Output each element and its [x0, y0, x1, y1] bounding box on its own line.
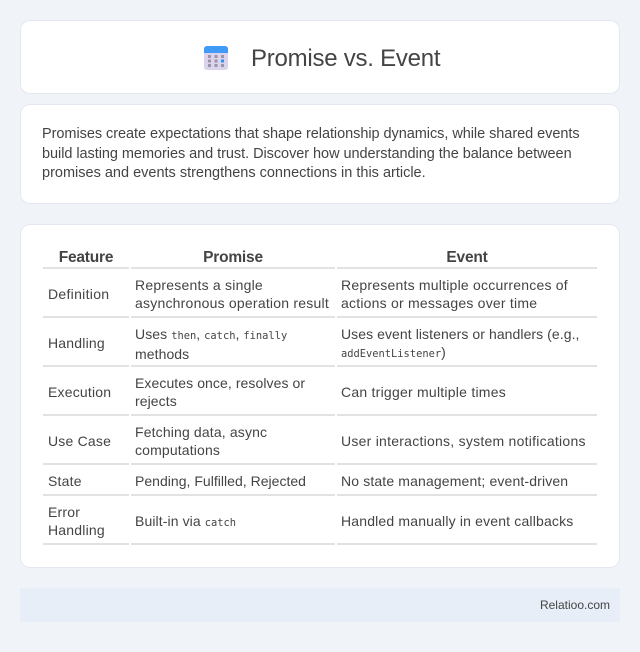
footer bar — [20, 588, 620, 622]
intro text: build lasting memories and trust. Discover how understanding the balance between — [42, 146, 572, 162]
row: use case — [48, 424, 586, 458]
footer brand text: Relatioo.com — [540, 598, 610, 612]
row: definition — [48, 277, 568, 311]
intro text — [42, 126, 580, 181]
column headers: Promise — [203, 249, 263, 266]
row: definition: Definition — [48, 286, 109, 302]
row: state — [48, 473, 568, 489]
row: handling: Uses then, catch, finally — [135, 326, 287, 342]
row: execution: Can trigger multiple times — [341, 384, 506, 400]
row: definition: Represents a single — [135, 277, 263, 293]
row: use case: computations — [135, 442, 220, 458]
row: error handling: Handling — [48, 522, 105, 538]
row: handling: addEventListener) — [341, 344, 446, 360]
panel: comparison table — [20, 224, 620, 568]
icon: calendar — [204, 46, 228, 70]
intro text: Promises create expectations that shape relationship dynamics, while shared events — [42, 126, 580, 142]
row: state: Pending, Fulfilled, Rejected — [135, 473, 306, 489]
row: handling: methods — [135, 346, 189, 362]
row: state: No state management; event-driven — [341, 473, 568, 489]
row: execution: Executes once, resolves or — [135, 375, 305, 391]
row: execution: rejects — [135, 393, 177, 409]
row: handling: Handling — [48, 335, 105, 351]
row: use case: User interactions, system notifications — [341, 433, 586, 449]
row: handling — [48, 326, 580, 362]
panel: title card — [20, 20, 620, 94]
row: definition: Represents multiple occurrences of — [341, 277, 568, 293]
column headers: Event — [446, 249, 488, 266]
row: execution — [48, 375, 506, 409]
row: error handling: Error — [48, 504, 80, 520]
row: execution: Execution — [48, 384, 111, 400]
row: error handling: Built-in via catch — [135, 513, 236, 529]
row: use case: Use Case — [48, 433, 111, 449]
title: Promise vs. Event — [251, 45, 440, 72]
panel: introduction — [20, 104, 620, 204]
row: definition: actions or messages over time — [341, 295, 537, 311]
row: state: State — [48, 473, 82, 489]
column headers — [59, 249, 488, 266]
row: handling: Uses event listeners or handlers (e.g., — [341, 326, 580, 342]
row: use case: Fetching data, async — [135, 424, 267, 440]
intro text: promises and events strengthens connections in this article. — [42, 165, 426, 181]
column headers: Feature — [59, 249, 113, 266]
row: error handling — [48, 504, 573, 538]
row: definition: asynchronous operation result — [135, 295, 329, 311]
row: error handling: Handled manually in event callbacks — [341, 513, 573, 529]
